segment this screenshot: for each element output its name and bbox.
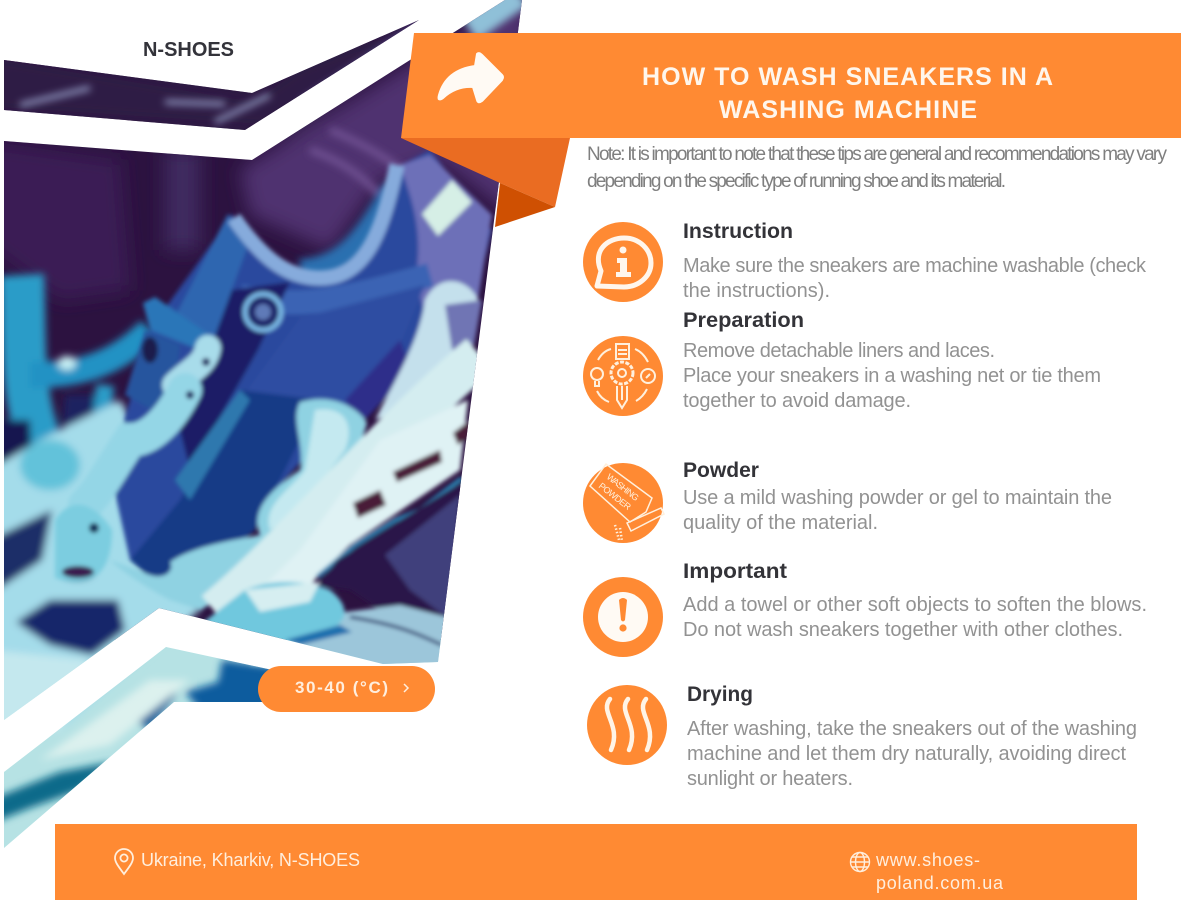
note: Note: It is important to note that these tips are general and recommendations may vary (587, 144, 1168, 165)
step: drying: sunlight or heaters. (687, 768, 853, 790)
step: preparation: Remove detachable liners and laces. (683, 340, 995, 362)
icon: curved arrow (438, 53, 503, 102)
lower band (182, 658, 270, 702)
icon: preparation gear and pencil (583, 336, 663, 416)
photo: sneaker in soapy washing machine (0, 0, 530, 860)
dark lower right (317, 480, 465, 620)
step: instruction (683, 220, 1147, 302)
foam heel (375, 281, 478, 420)
title: WASHING MACHINE (719, 96, 977, 124)
icon: instruction info bubble (583, 222, 663, 302)
note (587, 144, 1168, 192)
step: important: Important (683, 560, 787, 583)
icon: washing powder box: POWDER (597, 481, 633, 512)
title (642, 63, 1053, 124)
step: important (683, 560, 1147, 641)
step: preparation (683, 309, 1101, 412)
icon: washing powder box: WASHING (605, 472, 641, 503)
title: HOW TO WASH SNEAKERS IN A (642, 63, 1053, 91)
laces (143, 297, 214, 350)
step: powder: quality of the material. (683, 512, 878, 534)
footer website (875, 850, 1004, 893)
step: important: Add a towel or other soft objects to soften the blows. (683, 594, 1147, 616)
header ribbon fold (401, 138, 570, 227)
step: preparation: Preparation (683, 309, 804, 332)
note: depending on the specific type of running shoe and its material. (587, 171, 1006, 192)
icon: drying heat waves (587, 685, 667, 765)
step: powder: Powder (683, 459, 759, 482)
footer website: www.shoes- (875, 850, 980, 870)
step: important: Do not wash sneakers together with other clothes. (683, 619, 1123, 641)
footer bar (55, 824, 1137, 900)
step: powder (683, 459, 1112, 534)
icon: globe (850, 852, 870, 872)
step: drying (687, 683, 1137, 790)
sole (215, 355, 480, 612)
temperature pill (258, 666, 435, 712)
step: powder: Use a mild washing powder or gel to maintain the (683, 487, 1112, 509)
step: instruction: the instructions). (683, 280, 830, 302)
header banner (401, 33, 1181, 138)
shoe body (110, 150, 492, 560)
brand name: N-SHOES (143, 39, 234, 61)
footer location: Ukraine, Kharkiv, N-SHOES (141, 850, 360, 870)
heel tab (422, 180, 472, 236)
footer website: poland.com.ua (876, 873, 1004, 893)
icon: location pin (115, 849, 133, 874)
foam mid (110, 399, 367, 610)
icon: washing powder box (583, 463, 664, 543)
step: instruction: Make sure the sneakers are machine washable (check (683, 255, 1147, 277)
temperature pill: 30-40 (°C) (295, 678, 388, 697)
step: preparation: together to avoid damage. (683, 390, 911, 412)
step: instruction: Instruction (683, 220, 793, 243)
step: drying: Drying (687, 683, 753, 706)
icon: exclamation mark (583, 577, 663, 657)
step: preparation: Place your sneakers in a washing net or tie them (683, 365, 1101, 387)
step: drying: After washing, take the sneakers out of the washing (687, 718, 1137, 740)
step: drying: machine and let them dry naturally, avoiding direct (687, 743, 1126, 765)
